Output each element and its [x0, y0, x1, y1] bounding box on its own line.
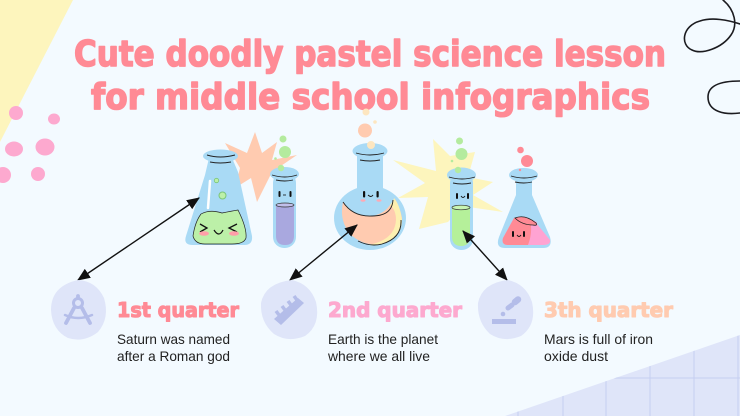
- text block: Saturn was named: [117, 331, 230, 347]
- illustration: peach star: [225, 132, 297, 202]
- heading: 2nd quarter: [328, 298, 462, 322]
- icon: compass: [51, 280, 106, 340]
- illustration: conical flask with green liquid: [185, 150, 252, 245]
- illustration: test tube with purple liquid: [270, 136, 299, 248]
- text block: Mars is full of iron: [544, 331, 653, 347]
- text block: [117, 331, 230, 364]
- decoration: pink dots: [0, 106, 60, 183]
- panel: 2nd quarter: [261, 280, 462, 364]
- title: [74, 34, 666, 118]
- panel: 1st quarter: [51, 280, 239, 364]
- arrow: round flask to second quarter: [290, 225, 357, 280]
- illustration: test tube with green liquid: [447, 138, 476, 250]
- text block: [327, 331, 438, 364]
- text block: [544, 331, 653, 364]
- arrow: test tube to third quarter: [463, 231, 507, 280]
- arrow: flask to first quarter: [78, 198, 199, 280]
- decoration: grid corner: [500, 330, 740, 416]
- icon: microscope: [478, 280, 533, 339]
- text block: oxide dust: [544, 348, 608, 364]
- heading: 1st quarter: [117, 298, 239, 322]
- icon: ruler: [261, 280, 317, 339]
- illustration: yellow star: [393, 139, 503, 229]
- decoration: black curls: [684, 0, 740, 114]
- text block: after a Roman god: [117, 348, 230, 364]
- decoration: yellow corner: [0, 0, 73, 142]
- panel: 3th quarter: [478, 280, 673, 364]
- text block: where we all live: [327, 348, 430, 364]
- text block: Earth is the planet: [328, 331, 438, 347]
- illustration: round flask with peach liquid: [334, 108, 406, 250]
- heading: 3th quarter: [544, 298, 673, 322]
- illustration: conical flask with pink liquid: [498, 147, 551, 248]
- title: for middle school infographics: [91, 77, 650, 118]
